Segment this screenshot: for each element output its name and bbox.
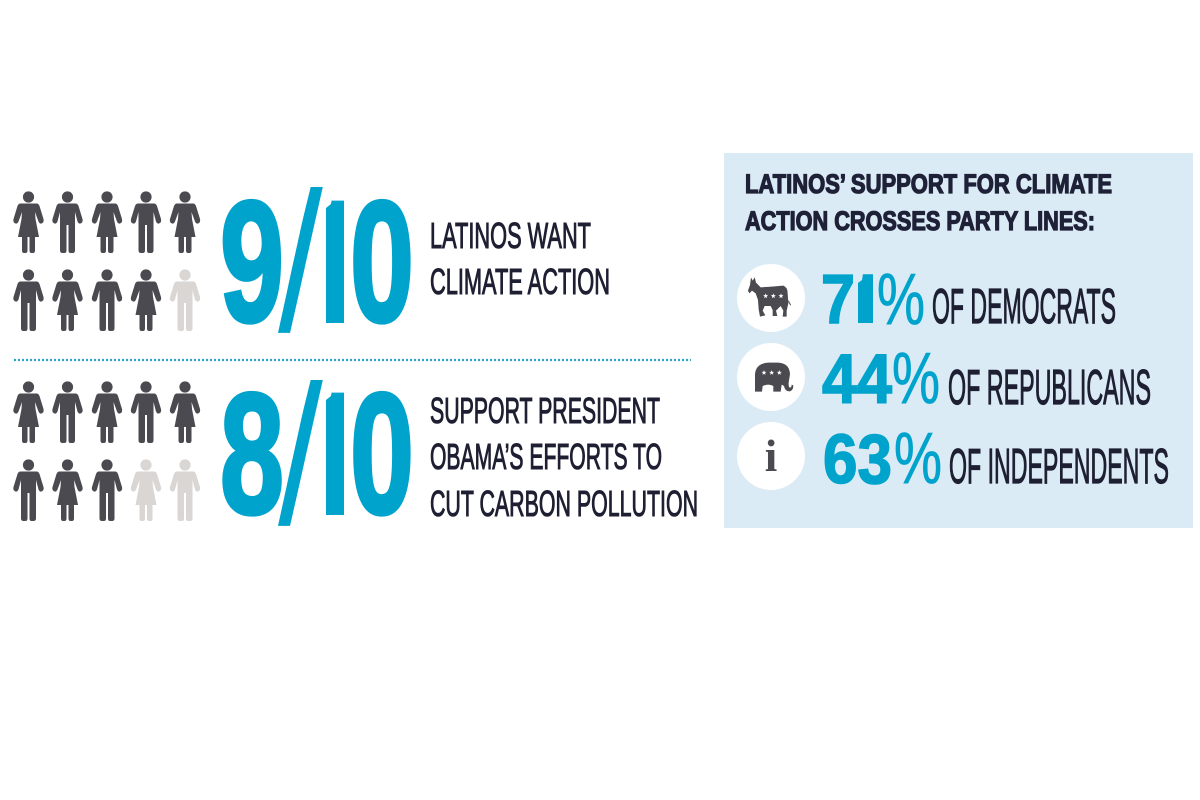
statistic: 71% of Democrats: % [877,260,925,340]
statistic: 9/10: / [276,153,325,372]
statistic: 44% of Republicans [822,339,1151,419]
statistic: 71% of Democrats: 1 [834,260,892,338]
statistic: 8/10: / [276,346,325,565]
icon: elephant [737,343,805,411]
panel heading: LATINOS’ SUPPORT FOR CLIMATE [745,169,1112,199]
statistic: 63% of Independents: 63 [823,420,892,498]
statistic: 71% of Democrats: 7 [821,260,855,338]
statistic: 9/10: 0 [350,166,414,358]
panel heading: ACTION CROSSES PARTY LINES: [745,206,1095,236]
statistic: 63% of Independents [823,419,1169,499]
icon: information [737,422,805,490]
pictogram: 9 of 10 people [13,191,200,331]
text: Latinos want climate action: LATINOS WANT [430,215,591,256]
icon: information: i [765,431,777,481]
text: support President Obama's efforts: CUT CARBON POLLUTION [430,483,698,524]
statistic: 44% of Republicans: % [892,339,940,419]
text: support President Obama's efforts: OBAMA’S EFFORTS TO [430,436,662,477]
statistic: 71% of Democrats [822,273,1116,325]
text: support President Obama's efforts: SUPPORT PRESIDENT [430,390,660,431]
statistic: 9/10: 1 [289,166,371,358]
statistic: 9/10: 9 [220,166,284,358]
statistic: 44% of Republicans: 44 [822,340,892,418]
statistic: 8/10: 1 [289,358,371,550]
panel background [724,153,1193,528]
statistic: 9/10 [222,187,411,333]
statistic: 63% of Independents: % [894,419,942,499]
statistic: 8/10: 8 [220,358,284,550]
text: Latinos want climate action: CLIMATE ACTION [430,261,610,302]
statistic: 8/10: 0 [350,358,414,550]
text: support President Obama's efforts [430,390,698,524]
dotted divider [14,359,691,361]
panel heading [745,169,1112,236]
pictogram: 8 of 10 people [13,381,200,521]
icon: donkey [737,264,805,332]
panel: party lines [724,153,1193,528]
statistic: 8/10 [222,380,411,526]
text: Latinos want climate action [430,215,610,302]
